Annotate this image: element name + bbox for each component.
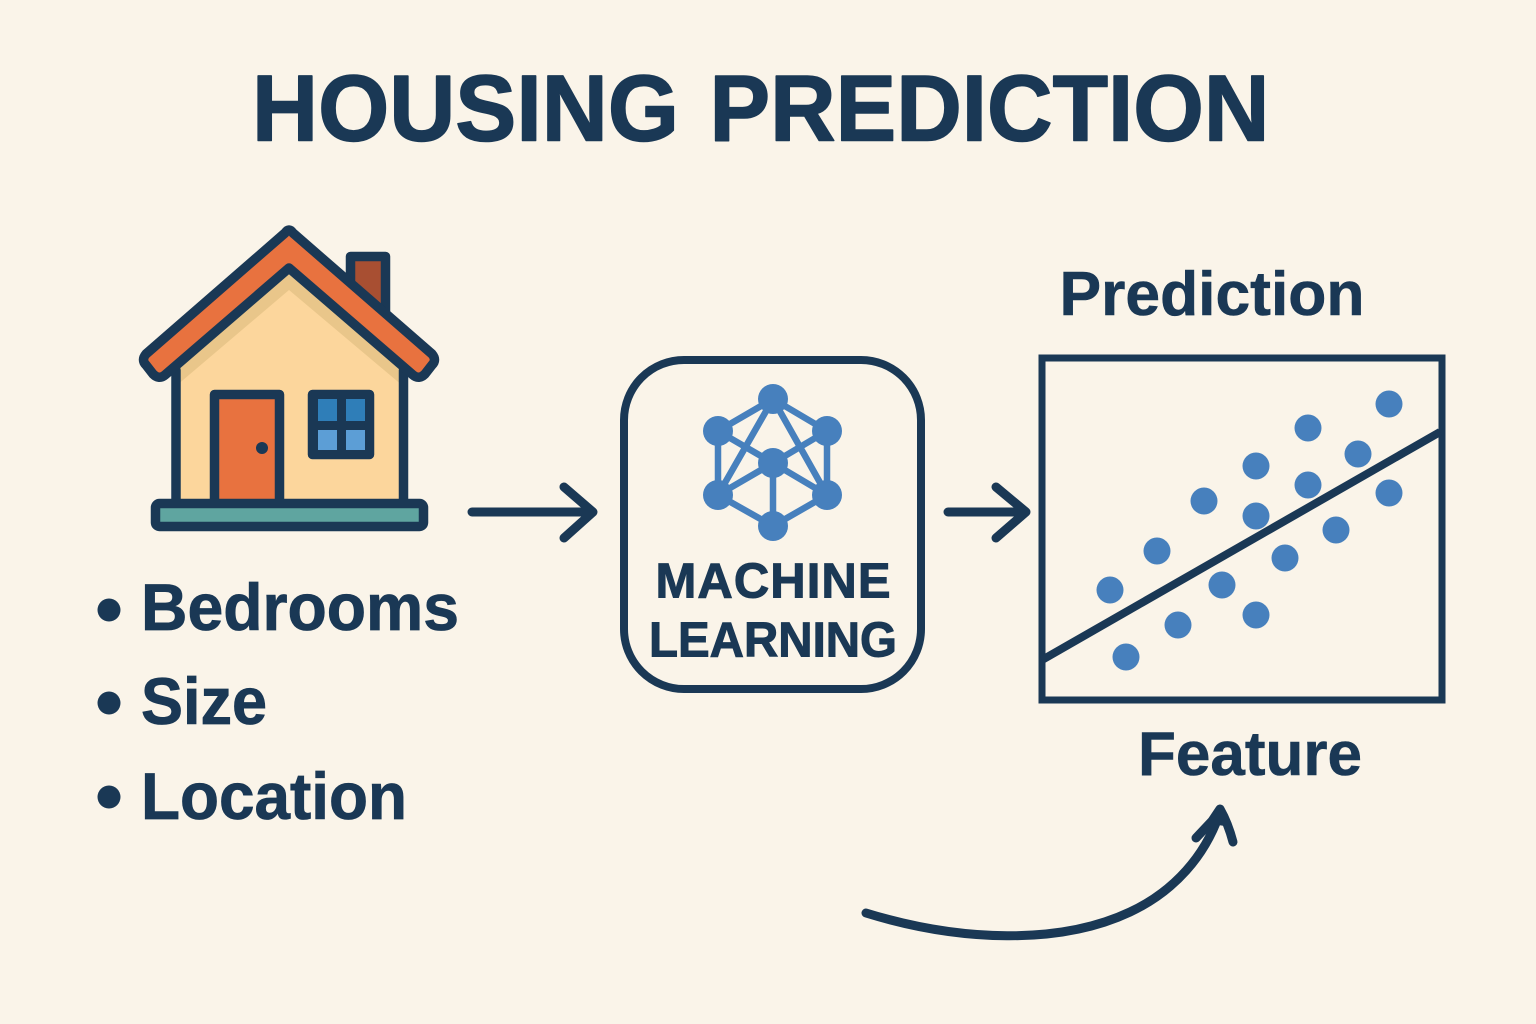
label: machine learning: [649, 554, 897, 668]
arrow: model to chart: [948, 487, 1026, 538]
bullet: location: Location: [141, 759, 407, 833]
icon: neural network: [703, 384, 842, 541]
bullet: size: Size: [141, 664, 267, 738]
title: PREDICTION: [710, 56, 1270, 160]
arrow: house to model: [472, 487, 593, 538]
bullet: bedrooms: Bedrooms: [141, 570, 459, 644]
label: machine learning: MACHINE: [656, 554, 890, 608]
panel: machine learning: [624, 360, 921, 689]
title: HOUSING: [252, 56, 679, 160]
axis label: feature: Feature: [1138, 720, 1362, 789]
feature list: [98, 570, 459, 833]
heading: prediction: Prediction: [1060, 260, 1364, 329]
icon: house: [144, 230, 434, 526]
arrow: curved feedback: [866, 809, 1233, 936]
label: machine learning: LEARNING: [649, 614, 897, 668]
title: [252, 56, 1270, 160]
chart: scatter plot: [1042, 358, 1442, 700]
